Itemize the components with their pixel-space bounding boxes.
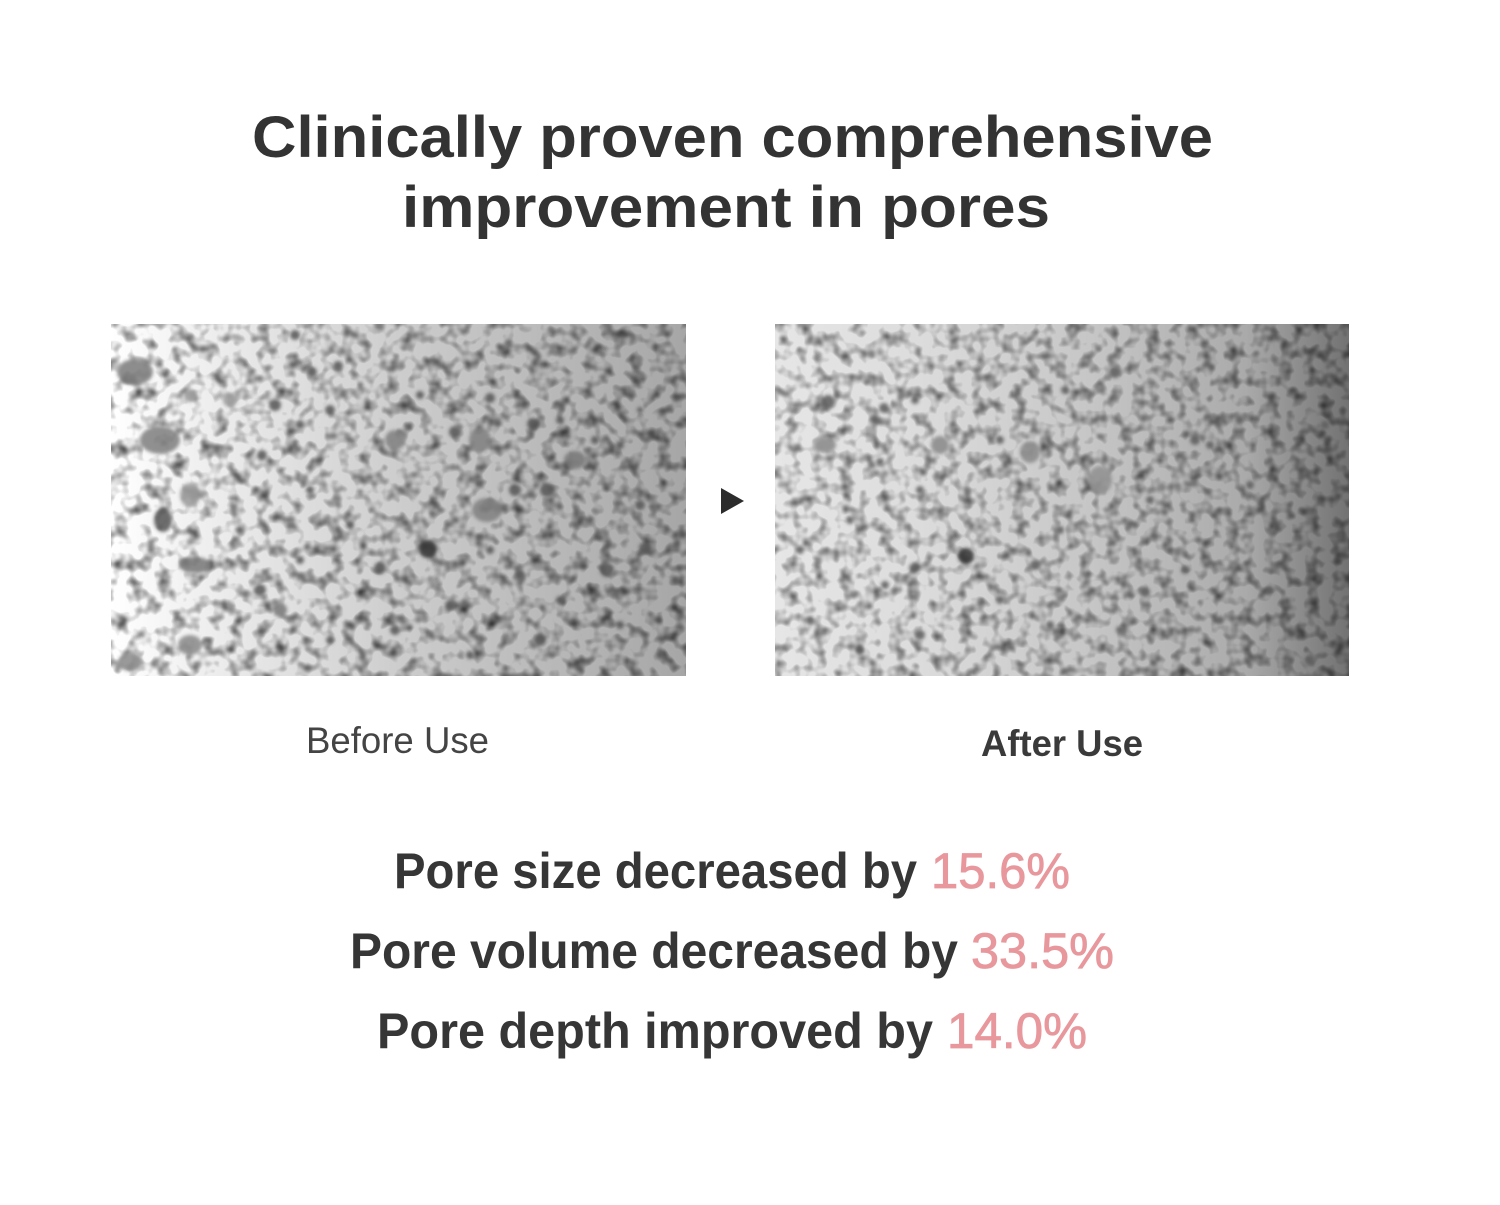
stat: pore volume: 33.5% bbox=[971, 923, 1114, 979]
photo: skin after use bbox=[775, 324, 1349, 676]
title: improvement in pores bbox=[402, 175, 1050, 240]
stat: pore depth: 14.0% bbox=[947, 1003, 1087, 1059]
title bbox=[252, 105, 1213, 240]
caption: before use: Before Use bbox=[306, 720, 489, 761]
title: Clinically proven comprehensive bbox=[252, 105, 1213, 170]
arrow bbox=[721, 488, 744, 514]
stat: pore volume: Pore volume decreased by bbox=[350, 923, 958, 979]
caption: after use: After Use bbox=[981, 723, 1143, 764]
stat: pore depth: Pore depth improved by bbox=[377, 1003, 933, 1059]
photo: skin before use bbox=[111, 324, 686, 676]
stat: pore size: Pore size decreased by bbox=[394, 843, 917, 899]
stat: pore size: 15.6% bbox=[931, 843, 1070, 899]
